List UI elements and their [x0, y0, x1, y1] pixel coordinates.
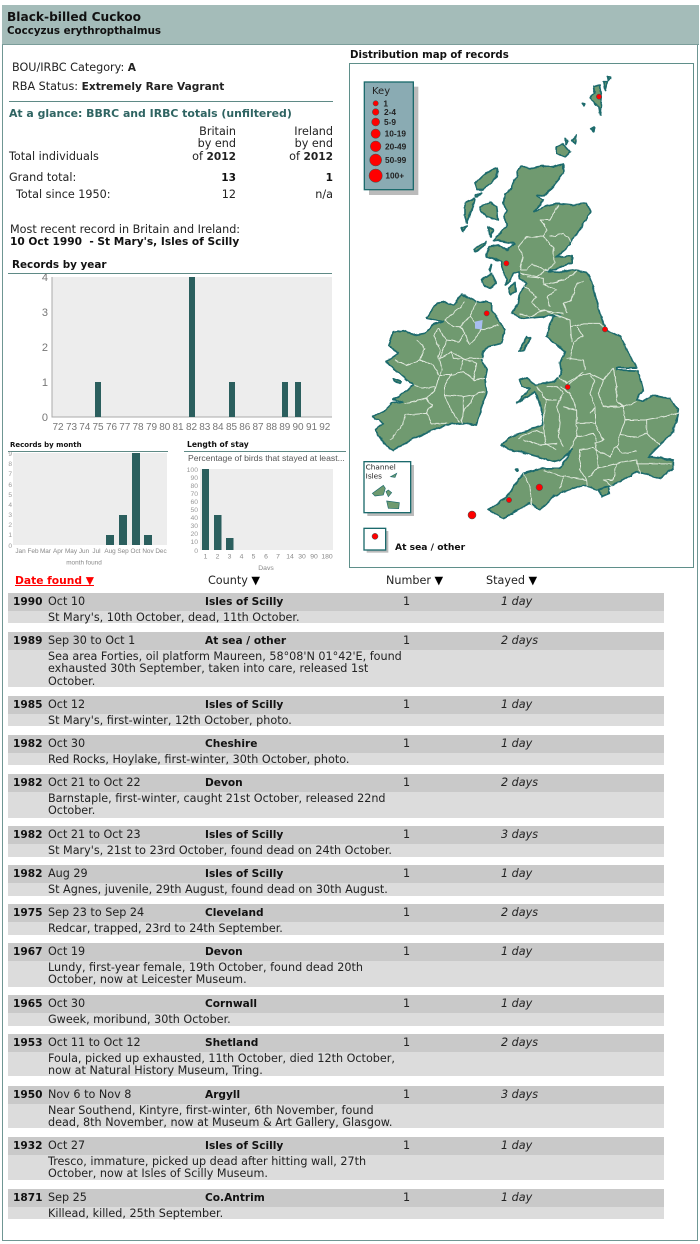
chart: records by month: 4: [8, 502, 12, 509]
record 1950: Near Southend, Kintyre, first-winter, 6th November, found: [48, 1104, 374, 1116]
record 1965: Oct 30: [48, 997, 85, 1010]
map: record dots: [468, 94, 608, 519]
record 1950: [8, 1086, 664, 1128]
record 1932: Tresco, immature, picked up dead after hitting wall, 27th: [48, 1154, 366, 1168]
record 1975: Sep 23 to Sep 24: [48, 906, 144, 919]
record 1871: [8, 1189, 664, 1219]
record 1985: 1 day: [501, 698, 532, 711]
record 1975: Redcar, trapped, 23rd to 24th September.: [48, 922, 283, 934]
chart: length of stay: 10: [190, 539, 198, 546]
chart: records by year: 1: [42, 377, 48, 389]
scientific name: Coccyzus erythropthalmus: [7, 25, 161, 37]
record 1982 Aug: 1: [403, 867, 410, 880]
record 1965: [8, 995, 664, 1026]
chart: records by year: 85: [226, 422, 237, 433]
record 1989: 1989: [13, 635, 42, 647]
chart: length of stay: 80: [190, 483, 198, 490]
record 1990: Oct 10: [48, 595, 85, 608]
sort header: stayed: Stayed ▼: [486, 574, 537, 587]
record 1967: Oct 19: [48, 945, 85, 958]
chart: records by year: 75: [92, 422, 104, 433]
record 1982 Cheshire: 1 day: [501, 737, 532, 750]
map: Lough Neagh: [475, 320, 483, 329]
chart: records by month: Apr: [53, 548, 64, 555]
map key: 20-49: [385, 141, 407, 151]
record 1967: 1 day: [501, 945, 532, 958]
record 1982 Devon: Oct 21 to Oct 22: [48, 776, 141, 789]
category: BOU/IRBC Category: A: [12, 61, 136, 74]
most recent record: [10, 223, 240, 248]
record 1950: 1950: [13, 1089, 42, 1101]
record 1965: Gweek, moribund, 30th October.: [48, 1012, 231, 1026]
record 1953: now at Natural History Museum, Tring.: [48, 1064, 263, 1077]
record 1982 Aug: Aug 29: [48, 867, 88, 880]
chart: length of stay: 90: [310, 554, 318, 560]
map: land and counties: [373, 76, 678, 518]
record 1967: 1967: [13, 946, 42, 958]
record 1982 Aug: St Agnes, juvenile, 29th August, found dead on 30th August.: [48, 882, 388, 896]
since 1950 Britain: 12: [222, 188, 236, 201]
record 1982 Cheshire: Oct 30: [48, 737, 85, 750]
chart: records by year: 79: [146, 422, 157, 433]
record 1989: 2 days: [501, 634, 538, 647]
record 1953: [8, 1034, 664, 1076]
chart: records by month: 0: [8, 543, 12, 550]
record 1990: 1 day: [501, 595, 532, 608]
since 1950 label: Total since 1950:: [16, 188, 111, 201]
map key: 2-4: [384, 107, 396, 117]
record 1989: At sea / other: [205, 635, 286, 647]
record 1967: Lundy, first-year female, 19th October, found dead 20th: [48, 960, 363, 974]
chart: records by year: 81: [172, 422, 184, 433]
distribution map: [363, 76, 680, 553]
record 1871: 1871: [13, 1192, 42, 1204]
record 1950: 1: [403, 1088, 410, 1101]
chart: records by month: Feb: [27, 548, 39, 555]
Ireland column heading: of 2012: [289, 150, 333, 163]
record 1985: [8, 696, 664, 726]
record 1982 Cheshire: 1982: [13, 738, 42, 750]
Britain column heading: [192, 125, 236, 163]
records by month heading: Records by month: [10, 441, 82, 449]
record 1975: 1: [403, 906, 410, 919]
record 1982 Isles of Scilly long: 1: [403, 828, 410, 841]
chart: records by month: Mar: [40, 548, 52, 555]
record 1985: 1985: [13, 699, 42, 711]
record 1932: 1 day: [501, 1139, 532, 1152]
chart: records by year: 73: [66, 422, 77, 433]
length of stay heading: Length of stay: [187, 440, 249, 449]
chart: records by month: 8: [8, 461, 12, 468]
chart: length of stay: 30: [190, 523, 198, 530]
chart: records by year: 91: [306, 422, 317, 433]
chart: length of stay: 50: [190, 507, 198, 514]
chart: records by year: 80: [159, 422, 171, 433]
record 1990: 1990: [13, 596, 42, 608]
chart: records by year: 76: [106, 422, 117, 433]
sort header: date found: Date found ▼: [15, 574, 94, 587]
map panel: [349, 63, 694, 568]
chart: records by month: 3: [8, 512, 12, 519]
chart: length of stay: 30: [298, 554, 306, 560]
chart: records by month: Jun: [79, 548, 90, 555]
record 1932: Oct 27: [48, 1139, 85, 1152]
record 1982 Aug: Isles of Scilly: [205, 868, 283, 880]
species name: Black-billed Cuckoo: [7, 10, 141, 24]
chart: length of stay: 1: [204, 554, 208, 560]
map: landmasses: [373, 76, 678, 518]
map key: Key: [372, 86, 390, 97]
record 1950: 3 days: [501, 1088, 538, 1101]
grand total Britain: 13: [221, 172, 236, 184]
chart: records by month: Jul: [92, 548, 101, 555]
since 1950 Ireland: n/a: [315, 188, 333, 201]
record 1982 Devon: Devon: [205, 777, 243, 789]
record 1975: [8, 904, 664, 935]
record 1982 Devon: Barnstaple, first-winter, caught 21st October, released 22nd: [48, 792, 386, 804]
RBA status: RBA Status: Extremely Rare Vagrant: [12, 80, 224, 93]
Ireland column heading: [289, 125, 333, 163]
record 1871: Co.Antrim: [205, 1192, 265, 1204]
chart: records by month: [8, 451, 167, 566]
map key: 1: [383, 98, 388, 108]
record 1953: Oct 11 to Oct 12: [48, 1036, 141, 1049]
chart: length of stay: [187, 467, 333, 570]
record 1965: 1: [403, 997, 410, 1010]
chart: records by year: 2: [42, 342, 48, 354]
chart: records by month: 7: [8, 471, 12, 478]
chart: records by year: 72: [52, 422, 64, 433]
Britain column heading: by end: [198, 137, 236, 150]
chart: length of stay: 3: [228, 554, 232, 560]
record 1989: Sea area Forties, oil platform Maureen, 58°08'N 01°42'E, found: [48, 650, 402, 662]
record 1982 Cheshire: [8, 735, 664, 765]
chart: records by year: 87: [252, 422, 264, 433]
chart: records by year: 74: [79, 422, 91, 433]
record 1990: Isles of Scilly: [205, 596, 283, 608]
chart: records by year: 78: [132, 422, 144, 433]
chart: records by month: Aug: [104, 548, 116, 555]
record 1932: 1: [403, 1139, 410, 1152]
Channel Isles inset: [364, 462, 414, 516]
chart: length of stay: 70: [190, 491, 198, 498]
record 1982 Isles of Scilly long: Oct 21 to Oct 23: [48, 828, 141, 841]
chart: length of stay: 6: [264, 554, 268, 560]
record 1982 Isles of Scilly long: [8, 826, 664, 857]
record 1989: 1: [403, 634, 410, 647]
chart: length of stay: 5: [252, 554, 256, 560]
chart: records by month: Sep: [117, 548, 129, 555]
total individuals label: Total individuals: [9, 150, 99, 163]
record 1989: [8, 632, 664, 687]
at a glance heading: At a glance: BBRC and IRBC totals (unfiltered): [9, 107, 292, 120]
record 1982 Devon: [8, 774, 664, 818]
record 1950: Argyll: [205, 1089, 240, 1101]
record 1982 Aug: [8, 865, 664, 896]
chart: records by month: 9: [8, 451, 12, 458]
record 1985: St Mary's, first-winter, 12th October, photo.: [48, 714, 292, 726]
record 1953: 2 days: [501, 1036, 538, 1049]
chart: records by month: Dec: [155, 548, 167, 555]
Britain column heading: of 2012: [192, 150, 236, 163]
chart: records by month: Nov: [142, 548, 154, 555]
record 1932: [8, 1137, 664, 1180]
record 1985: Oct 12: [48, 698, 85, 711]
chart: records by year: [42, 272, 332, 433]
record 1965: 1 day: [501, 997, 532, 1010]
record 1967: [8, 943, 664, 987]
record 1871: Killead, killed, 25th September.: [48, 1206, 223, 1220]
record 1982 Isles of Scilly long: Isles of Scilly: [205, 829, 283, 841]
at sea inset: [364, 528, 466, 553]
chart: length of stay: 100: [187, 467, 198, 474]
map key: 10-19: [385, 129, 406, 139]
most recent record: Most recent record in Britain and Ireland:: [10, 223, 240, 236]
record 1932: October, now at Isles of Scilly Museum.: [48, 1167, 268, 1180]
grand total Ireland: 1: [326, 172, 333, 184]
length of stay caption: Percentage of birds that stayed at least...: [188, 453, 345, 463]
records by year heading: Records by year: [12, 259, 106, 271]
map heading: Distribution map of records: [350, 50, 509, 61]
Channel Isles inset: Channel: [366, 462, 396, 471]
chart: records by year: 90: [292, 422, 304, 433]
record 1975: 1975: [13, 907, 42, 919]
record 1965: Cornwall: [205, 998, 257, 1010]
chart: records by month: 2: [8, 522, 12, 529]
chart: records by year: 3: [42, 307, 48, 319]
chart: length of stay: 0: [194, 548, 198, 555]
chart: records by year: 88: [266, 422, 277, 433]
map key: 50-99: [385, 155, 407, 165]
record 1982 Cheshire: 1: [403, 737, 410, 750]
record 1967: 1: [403, 945, 410, 958]
chart: records by year: 86: [239, 422, 251, 433]
chart: records by month: 5: [8, 492, 12, 499]
chart: records by year: 89: [279, 422, 291, 433]
record 1985: 1: [403, 698, 410, 711]
chart: length of stay: 60: [190, 499, 198, 506]
Britain column heading: Britain: [199, 125, 236, 138]
chart: records by year: 92: [319, 422, 331, 433]
at sea inset: At sea / other: [395, 542, 466, 553]
chart: length of stay: 7: [276, 554, 280, 560]
record 1871: 1 day: [501, 1191, 532, 1204]
record 1932: 1932: [13, 1140, 42, 1152]
record 1967: October, now at Leicester Museum.: [48, 973, 247, 986]
map key: 5-9: [384, 117, 396, 127]
record 1982 Cheshire: Red Rocks, Hoylake, first-winter, 30th October, photo.: [48, 752, 349, 766]
chart: records by month: month found: [66, 560, 102, 566]
record 1989: exhausted 30th September, taken into care, released 1st: [48, 662, 368, 675]
record 1982 Aug: 1 day: [501, 867, 532, 880]
map: county boundaries: [390, 205, 678, 507]
record 1982 Devon: 1982: [13, 777, 42, 789]
record 1965: 1965: [13, 998, 42, 1010]
record 1990: [8, 593, 664, 623]
record 1982 Devon: 1: [403, 776, 410, 789]
record 1985: Isles of Scilly: [205, 699, 283, 711]
chart: length of stay: 40: [190, 515, 198, 522]
title banner: [2, 5, 699, 45]
record 1967: Devon: [205, 946, 243, 958]
most recent record: 10 Oct 1990 - St Mary's, Isles of Scilly: [10, 236, 239, 248]
record 1982 Isles of Scilly long: 3 days: [501, 828, 538, 841]
record 1989: Sep 30 to Oct 1: [48, 634, 135, 647]
map key: 100+: [385, 171, 404, 181]
record 1989: October.: [48, 674, 95, 688]
Ireland column heading: Ireland: [294, 125, 333, 138]
record 1953: 1953: [13, 1037, 42, 1049]
record 1982 Devon: 2 days: [501, 776, 538, 789]
record 1932: Isles of Scilly: [205, 1140, 283, 1152]
chart: records by year: 84: [212, 422, 224, 433]
chart: records by month: May: [65, 548, 78, 555]
map key: [364, 82, 418, 195]
chart: records by year: 77: [119, 422, 131, 433]
record 1871: 1: [403, 1191, 410, 1204]
record 1982 Cheshire: Cheshire: [205, 738, 257, 750]
sort header: county: County ▼: [208, 574, 260, 587]
chart: records by month: 1: [8, 532, 12, 539]
record 1950: dead, 8th November, now at Museum & Art Gallery, Glasgow.: [48, 1116, 392, 1129]
record 1871: Sep 25: [48, 1191, 87, 1204]
chart: records by month: Oct: [131, 548, 141, 555]
Ireland column heading: by end: [295, 137, 333, 150]
record 1975: 2 days: [501, 906, 538, 919]
chart: records by year: 83: [199, 422, 211, 433]
chart: length of stay: 180: [321, 554, 333, 560]
record 1982 Isles of Scilly long: 1982: [13, 829, 42, 841]
chart: length of stay: 2: [216, 554, 220, 560]
record 1982 Isles of Scilly long: St Mary's, 21st to 23rd October, found dead on 24th October.: [48, 844, 392, 856]
chart: length of stay: 14: [286, 554, 294, 560]
chart: records by year: 0: [42, 412, 48, 424]
record 1953: Shetland: [205, 1037, 258, 1049]
Channel Isles inset: Isles: [366, 471, 382, 480]
record 1990: St Mary's, 10th October, dead, 11th October.: [48, 610, 300, 624]
record 1953: Foula, picked up exhausted, 11th October, died 12th October,: [48, 1052, 395, 1064]
grand total label: Grand total:: [9, 171, 76, 184]
chart: length of stay: 4: [240, 554, 244, 560]
record 1953: 1: [403, 1036, 410, 1049]
chart: records by year: 4: [42, 272, 48, 284]
record 1990: 1: [403, 595, 410, 608]
record 1982 Devon: October.: [48, 804, 95, 817]
chart: length of stay: 90: [190, 475, 198, 482]
totals table: [8, 125, 333, 201]
chart: records by year: 82: [186, 422, 197, 433]
chart: length of stay: 20: [190, 531, 198, 538]
chart: records by month: Jan: [15, 548, 26, 555]
sort header: number: Number ▼: [386, 574, 443, 587]
chart: records by month: 6: [8, 482, 12, 489]
record 1975: Cleveland: [205, 907, 264, 919]
record 1950: Nov 6 to Nov 8: [48, 1088, 131, 1101]
record 1982 Aug: 1982: [13, 868, 42, 880]
